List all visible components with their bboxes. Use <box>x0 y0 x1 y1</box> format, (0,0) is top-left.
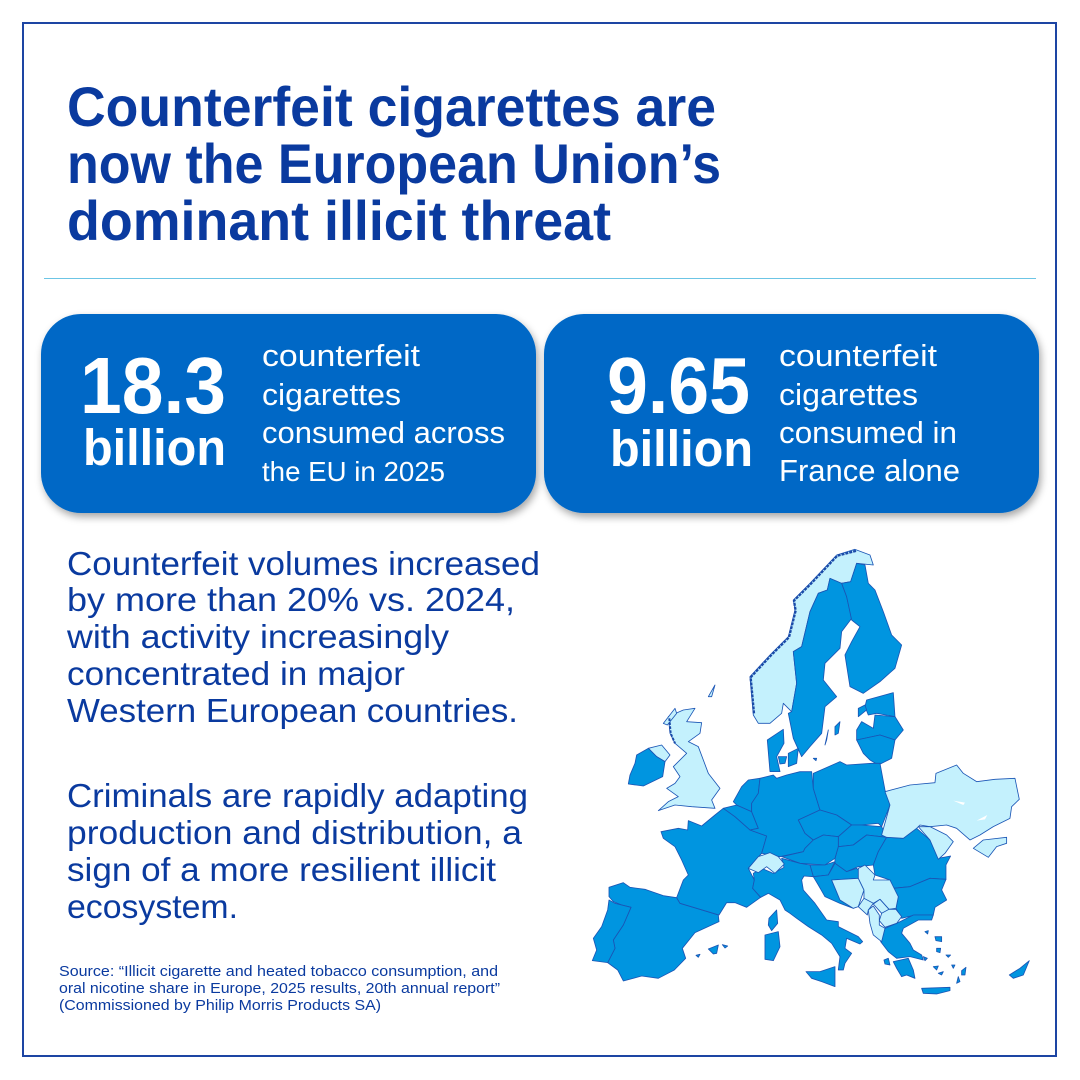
text block: criminals <box>67 777 528 925</box>
Finland <box>842 563 902 693</box>
France stat description: cigarettes <box>779 377 918 412</box>
text block: volumes: Counterfeit volumes increased <box>67 545 540 582</box>
map of Europe <box>592 549 1029 994</box>
Northern Ireland <box>648 745 670 762</box>
source note: oral nicotine share in Europe, 2025 results, 20th annual report” <box>59 981 500 997</box>
Scottish coast detail <box>669 718 675 743</box>
Scottish isles <box>663 685 715 725</box>
Albania <box>868 906 885 942</box>
Hungary <box>835 835 887 872</box>
France stat description: France alone <box>779 453 960 488</box>
North Macedonia <box>879 909 902 927</box>
Peloponnese <box>893 958 915 978</box>
text block: criminals: sign of a more resilient illicit <box>67 851 496 888</box>
Baltic states <box>813 693 903 765</box>
text block: volumes <box>66 545 540 729</box>
Mediterranean islands <box>696 910 1029 994</box>
non-EU countries <box>748 765 1019 942</box>
Norway <box>750 549 873 723</box>
panel: EU stat card <box>41 314 536 513</box>
EU stat description: consumed across <box>262 415 505 450</box>
mainland EU countries <box>592 762 951 981</box>
stat: 18.3 billion: 18.3 <box>80 341 226 430</box>
text block: volumes: by more than 20% vs. 2024, <box>67 581 515 618</box>
Portugal <box>592 900 631 963</box>
Crimea <box>973 837 1007 857</box>
Norway coast detail <box>751 551 857 713</box>
title: now the European Union’s <box>67 132 721 195</box>
France stat description: consumed in <box>779 415 957 450</box>
text block: criminals: ecosystem. <box>67 888 238 925</box>
source note <box>59 964 500 1014</box>
UK <box>658 708 720 811</box>
Austria <box>782 835 838 865</box>
France stat description <box>779 338 960 488</box>
Switzerland <box>748 853 784 873</box>
stat: 18.3 billion <box>80 341 226 476</box>
Italy <box>753 858 863 970</box>
Serbia <box>858 865 898 909</box>
Germany <box>750 772 820 857</box>
France stat description: counterfeit <box>779 338 937 373</box>
title <box>67 75 721 252</box>
panel: France stat card <box>544 314 1039 513</box>
Czechia <box>798 810 852 840</box>
EU stat description: counterfeit <box>262 338 420 373</box>
text block: criminals: production and distribution, a <box>67 814 523 851</box>
text block: volumes: concentrated in major <box>67 655 405 692</box>
stat: 9.65 billion <box>607 341 753 477</box>
Greece <box>881 915 933 960</box>
Denmark <box>767 729 798 772</box>
title: Counterfeit cigarettes are <box>67 75 716 138</box>
Poland <box>813 762 890 827</box>
Kosovo <box>873 899 889 913</box>
Sweden <box>788 578 852 757</box>
Bosnia <box>832 878 864 908</box>
stat: 18.3 billion: billion <box>83 419 226 476</box>
Ukraine reservoirs <box>953 801 987 821</box>
Romania <box>873 828 951 888</box>
France <box>661 808 767 915</box>
source note: (Commissioned by Philip Morris Products SA) <box>59 998 381 1014</box>
source note: Source: “Illicit cigarette and heated tobacco consumption, and <box>59 964 498 980</box>
Netherlands <box>733 778 760 812</box>
stat: 9.65 billion: billion <box>610 420 753 477</box>
title: dominant illicit threat <box>67 189 611 252</box>
EU stat description <box>262 338 505 487</box>
stat: 9.65 billion: 9.65 <box>607 341 750 430</box>
Bulgaria <box>893 878 947 918</box>
Montenegro <box>858 898 873 915</box>
Slovakia <box>838 825 887 847</box>
EU stat description: the EU in 2025 <box>262 456 445 487</box>
map: central and southern Europe <box>592 685 1029 994</box>
text block: criminals: Criminals are rapidly adapting <box>67 777 528 814</box>
text block: volumes: Western European countries. <box>67 692 518 729</box>
Slovenia <box>810 862 835 877</box>
Croatia <box>813 863 862 908</box>
Moldova <box>918 827 953 859</box>
text block: volumes: with activity increasingly <box>66 618 450 655</box>
Belgium <box>723 805 758 830</box>
Ireland <box>628 748 665 786</box>
Spain <box>608 883 719 981</box>
EU stat description: cigarettes <box>262 377 401 412</box>
map: northern Europe <box>750 549 903 772</box>
Ukraine <box>882 765 1019 840</box>
